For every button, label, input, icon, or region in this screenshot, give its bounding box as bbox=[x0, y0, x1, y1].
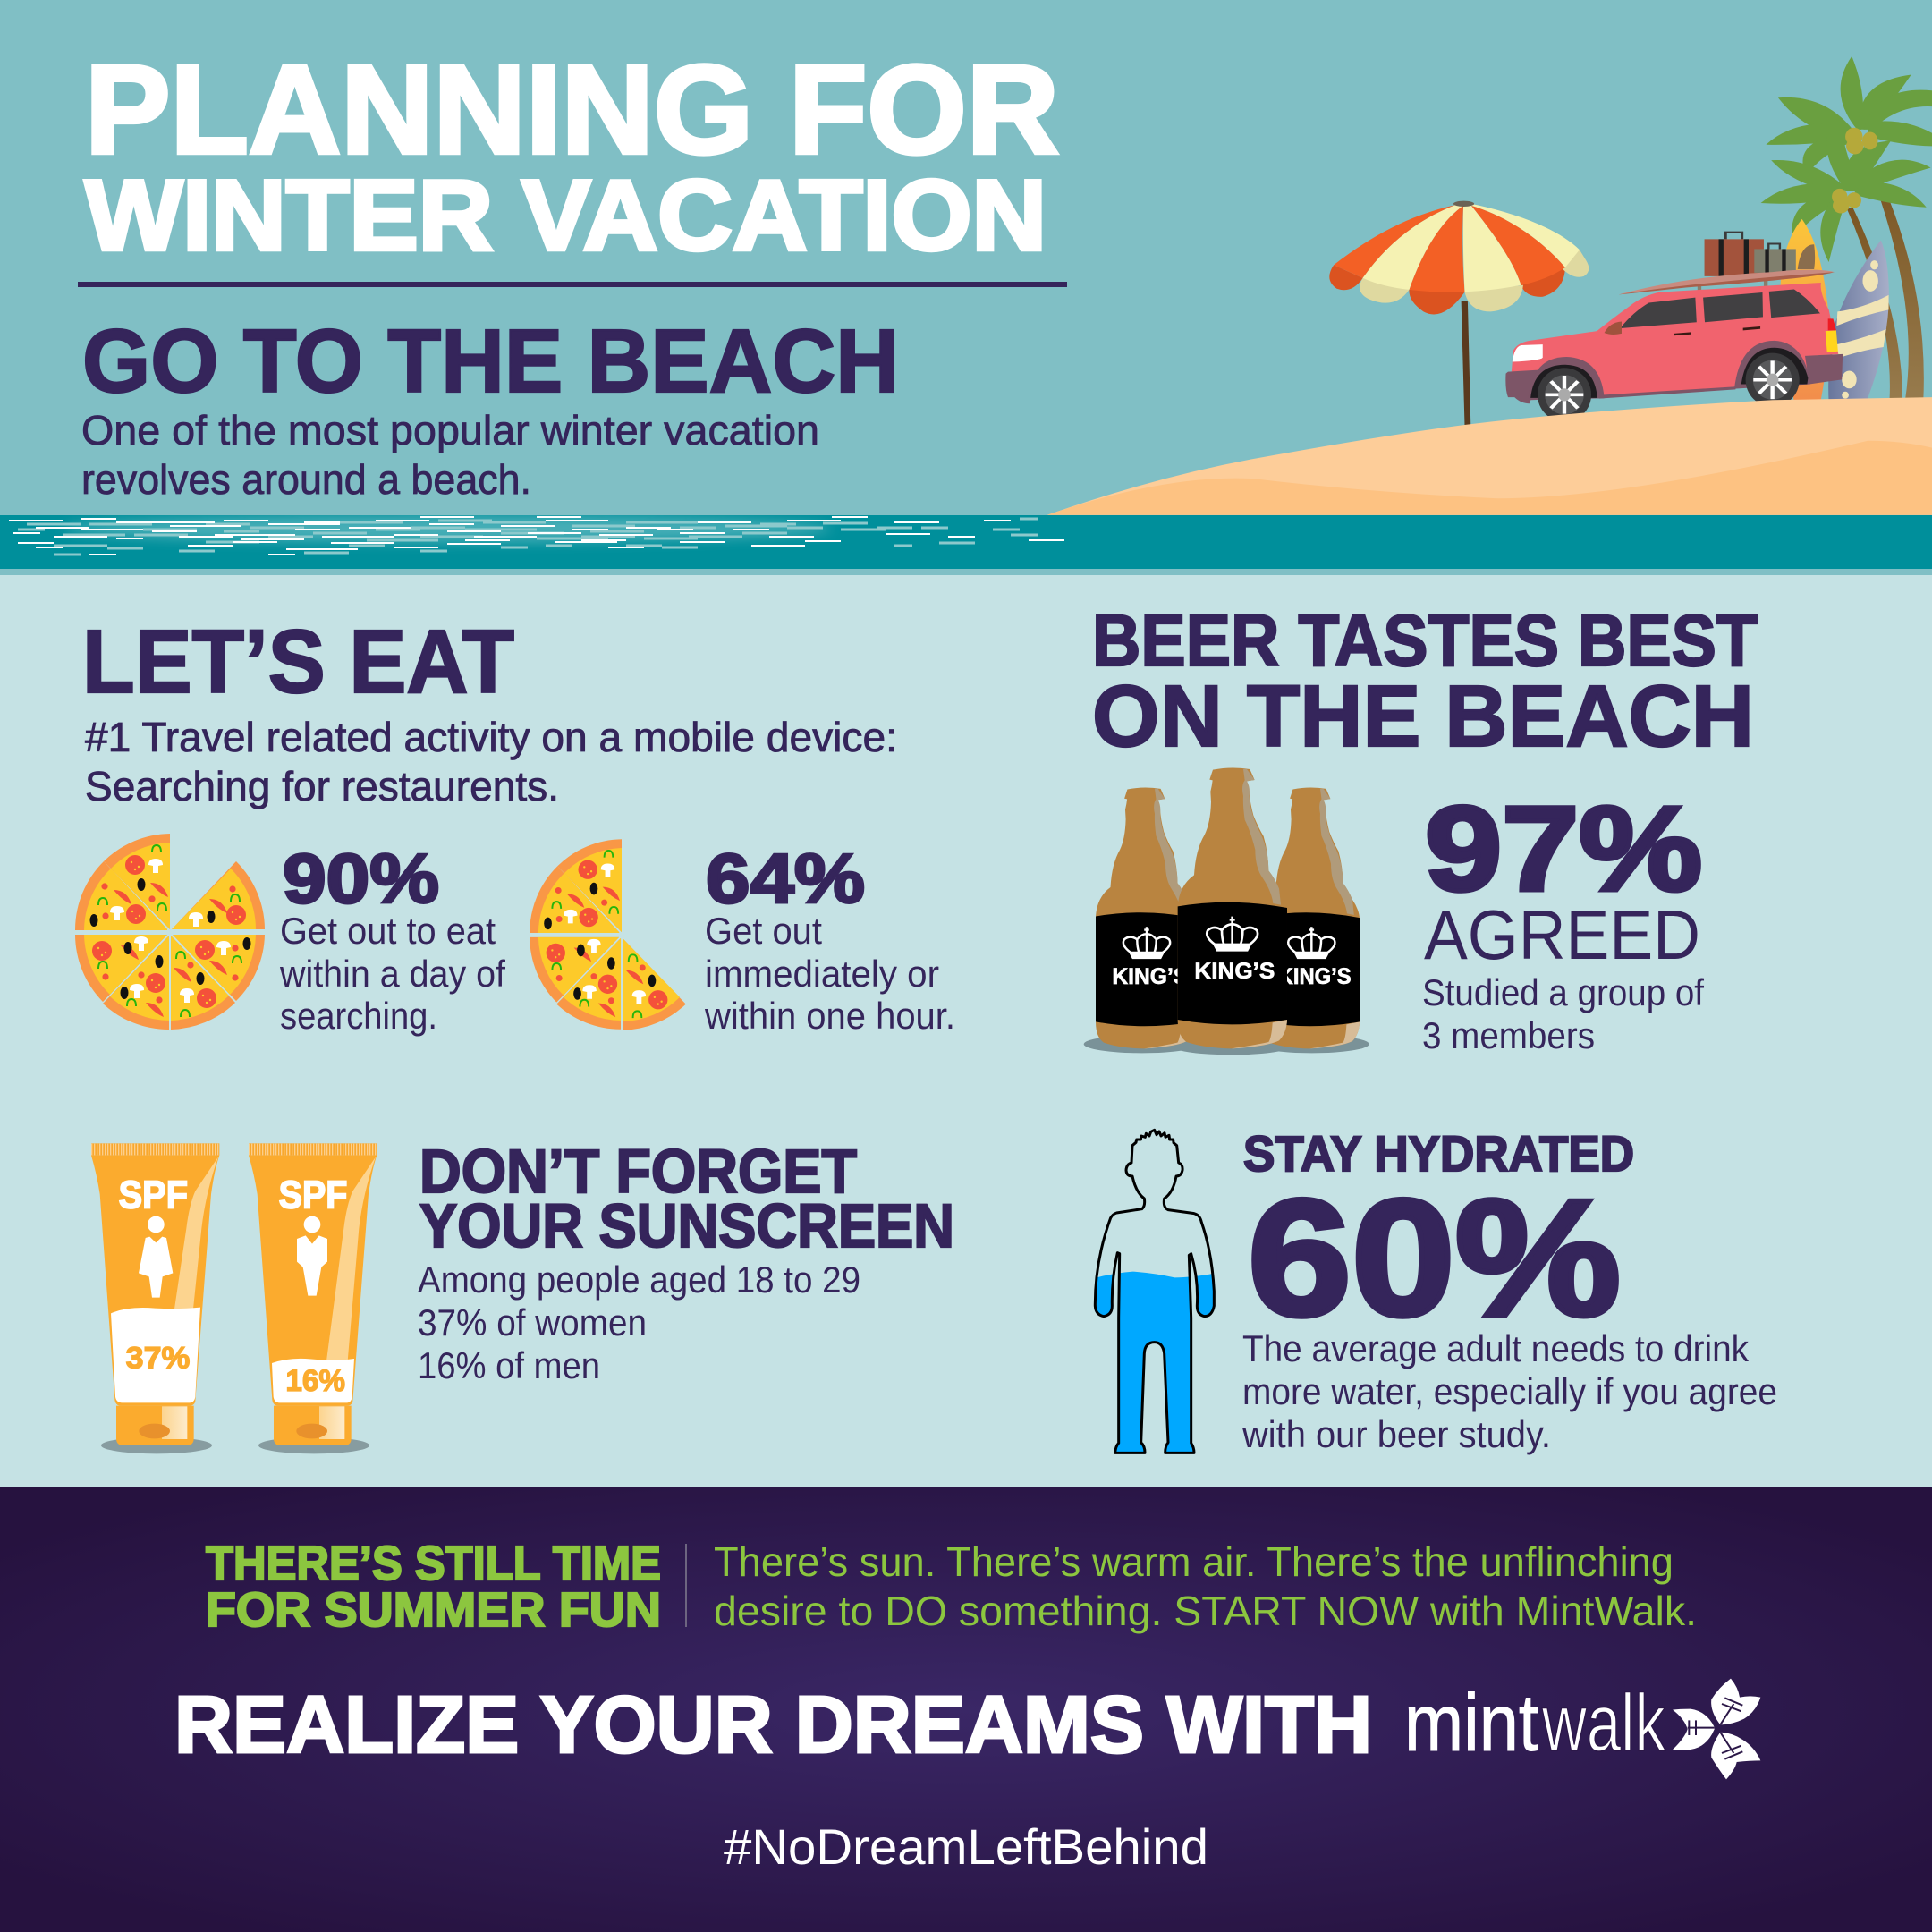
heading: YOUR SUNSCREEN bbox=[419, 1191, 954, 1260]
panel: footer bbox=[0, 1487, 1932, 1932]
icon: pizza 90% bbox=[75, 834, 265, 1030]
panel: sunscreen bbox=[91, 1137, 954, 1453]
stat: 90%: 90% bbox=[283, 839, 439, 918]
beach scene illustration bbox=[1047, 56, 1932, 515]
icon: beer bottles: KING’S bbox=[1112, 965, 1188, 989]
stat: 64%: 64% bbox=[706, 839, 865, 918]
heading: ON THE BEACH bbox=[1092, 667, 1754, 765]
logo: mintwalk bbox=[1404, 1679, 1760, 1779]
panel: stay hydrated bbox=[1091, 1125, 1777, 1455]
intro text bbox=[81, 407, 819, 503]
icon: beer bottles bbox=[1084, 767, 1369, 1055]
icon: beer bottles: KING’S bbox=[1194, 960, 1275, 984]
panel: beach header bbox=[0, 0, 1932, 575]
green message bbox=[714, 1538, 1697, 1634]
heading: DON’T FORGET bbox=[419, 1137, 857, 1206]
sand bbox=[1047, 397, 1932, 515]
green heading: THERE’S STILL TIME bbox=[206, 1537, 661, 1590]
tube women: SPF bbox=[119, 1174, 188, 1217]
title: WINTER VACATION bbox=[85, 160, 1046, 271]
description: Among people aged 18 to 29 bbox=[418, 1258, 860, 1301]
heading: LET’S EAT bbox=[82, 612, 514, 712]
description: #1 Travel related activity on a mobile device: bbox=[85, 714, 897, 760]
tube women bbox=[91, 1143, 219, 1453]
hashtag: #NoDreamLeftBehind bbox=[724, 1818, 1208, 1875]
surfboards bbox=[1780, 219, 1889, 403]
stat: 97% agreed: 3 members bbox=[1422, 1014, 1595, 1056]
description: 16% of men bbox=[418, 1344, 600, 1386]
green heading: FOR SUMMER FUN bbox=[206, 1583, 661, 1637]
green message: desire to DO something. START NOW with MintWalk. bbox=[714, 1588, 1697, 1634]
palm trees bbox=[1761, 56, 1932, 400]
tube women: 37% bbox=[126, 1341, 190, 1375]
icon: sunscreen tubes bbox=[91, 1143, 377, 1453]
panel: beer bbox=[1084, 600, 1758, 1056]
icon: water person bbox=[1091, 1130, 1216, 1455]
stat: 60%: 60% bbox=[1248, 1166, 1621, 1351]
stat: 97% agreed: Studied a group of bbox=[1422, 971, 1704, 1013]
heading bbox=[1092, 600, 1758, 765]
icon: pizza 64% bbox=[530, 839, 686, 1030]
logo: mintwalk: mint bbox=[1404, 1679, 1538, 1768]
tube men: SPF bbox=[279, 1174, 347, 1217]
suitcases bbox=[1705, 233, 1796, 276]
stat: 64%: Get out bbox=[705, 910, 822, 952]
green heading bbox=[206, 1537, 661, 1637]
subtitle: GO TO THE BEACH bbox=[82, 311, 899, 411]
icon: beer bottles: KING’S bbox=[1278, 965, 1352, 989]
stat: 90%: searching. bbox=[280, 995, 437, 1037]
description: Searching for restaurents. bbox=[85, 763, 559, 809]
stat: 97% agreed: AGREED bbox=[1424, 895, 1700, 974]
title: PLANNING FOR bbox=[85, 38, 1059, 180]
sea bbox=[0, 515, 1932, 569]
stat: 97% agreed bbox=[1422, 783, 1704, 1056]
intro text: revolves around a beach. bbox=[81, 456, 531, 503]
stat: 64%: within one hour. bbox=[704, 995, 955, 1037]
description: with our beer study. bbox=[1241, 1413, 1551, 1455]
stat: 90%: Get out to eat bbox=[280, 910, 496, 952]
slogan: REALIZE YOUR DREAMS WITH bbox=[174, 1681, 1372, 1770]
panel: let's eat bbox=[75, 612, 955, 1037]
description: The average adult needs to drink bbox=[1242, 1327, 1750, 1369]
heading: BEER TASTES BEST bbox=[1092, 600, 1758, 682]
description: 37% of women bbox=[418, 1301, 647, 1343]
description bbox=[85, 714, 897, 809]
tube men bbox=[249, 1143, 377, 1453]
tube men: 16% bbox=[285, 1364, 345, 1398]
green message: There’s sun. There’s warm air. There’s the unflinching bbox=[714, 1538, 1674, 1585]
title bbox=[85, 38, 1059, 271]
description: more water, especially if you agree bbox=[1242, 1370, 1777, 1412]
heading bbox=[419, 1137, 954, 1260]
description bbox=[1241, 1327, 1777, 1455]
description bbox=[418, 1258, 860, 1386]
roof board bbox=[1619, 270, 1835, 294]
heading: STAY HYDRATED bbox=[1243, 1125, 1634, 1182]
stat: 97% agreed: 97% bbox=[1425, 783, 1702, 916]
intro text: One of the most popular winter vacation bbox=[81, 407, 819, 453]
logo: mintwalk: walk bbox=[1541, 1679, 1666, 1768]
stat: 64% bbox=[704, 839, 955, 1037]
stat: 90% bbox=[279, 839, 505, 1037]
stat: 64%: immediately or bbox=[705, 953, 939, 995]
umbrella bbox=[1329, 201, 1589, 426]
stat: 90%: within a day of bbox=[279, 953, 505, 995]
car bbox=[1505, 283, 1843, 421]
